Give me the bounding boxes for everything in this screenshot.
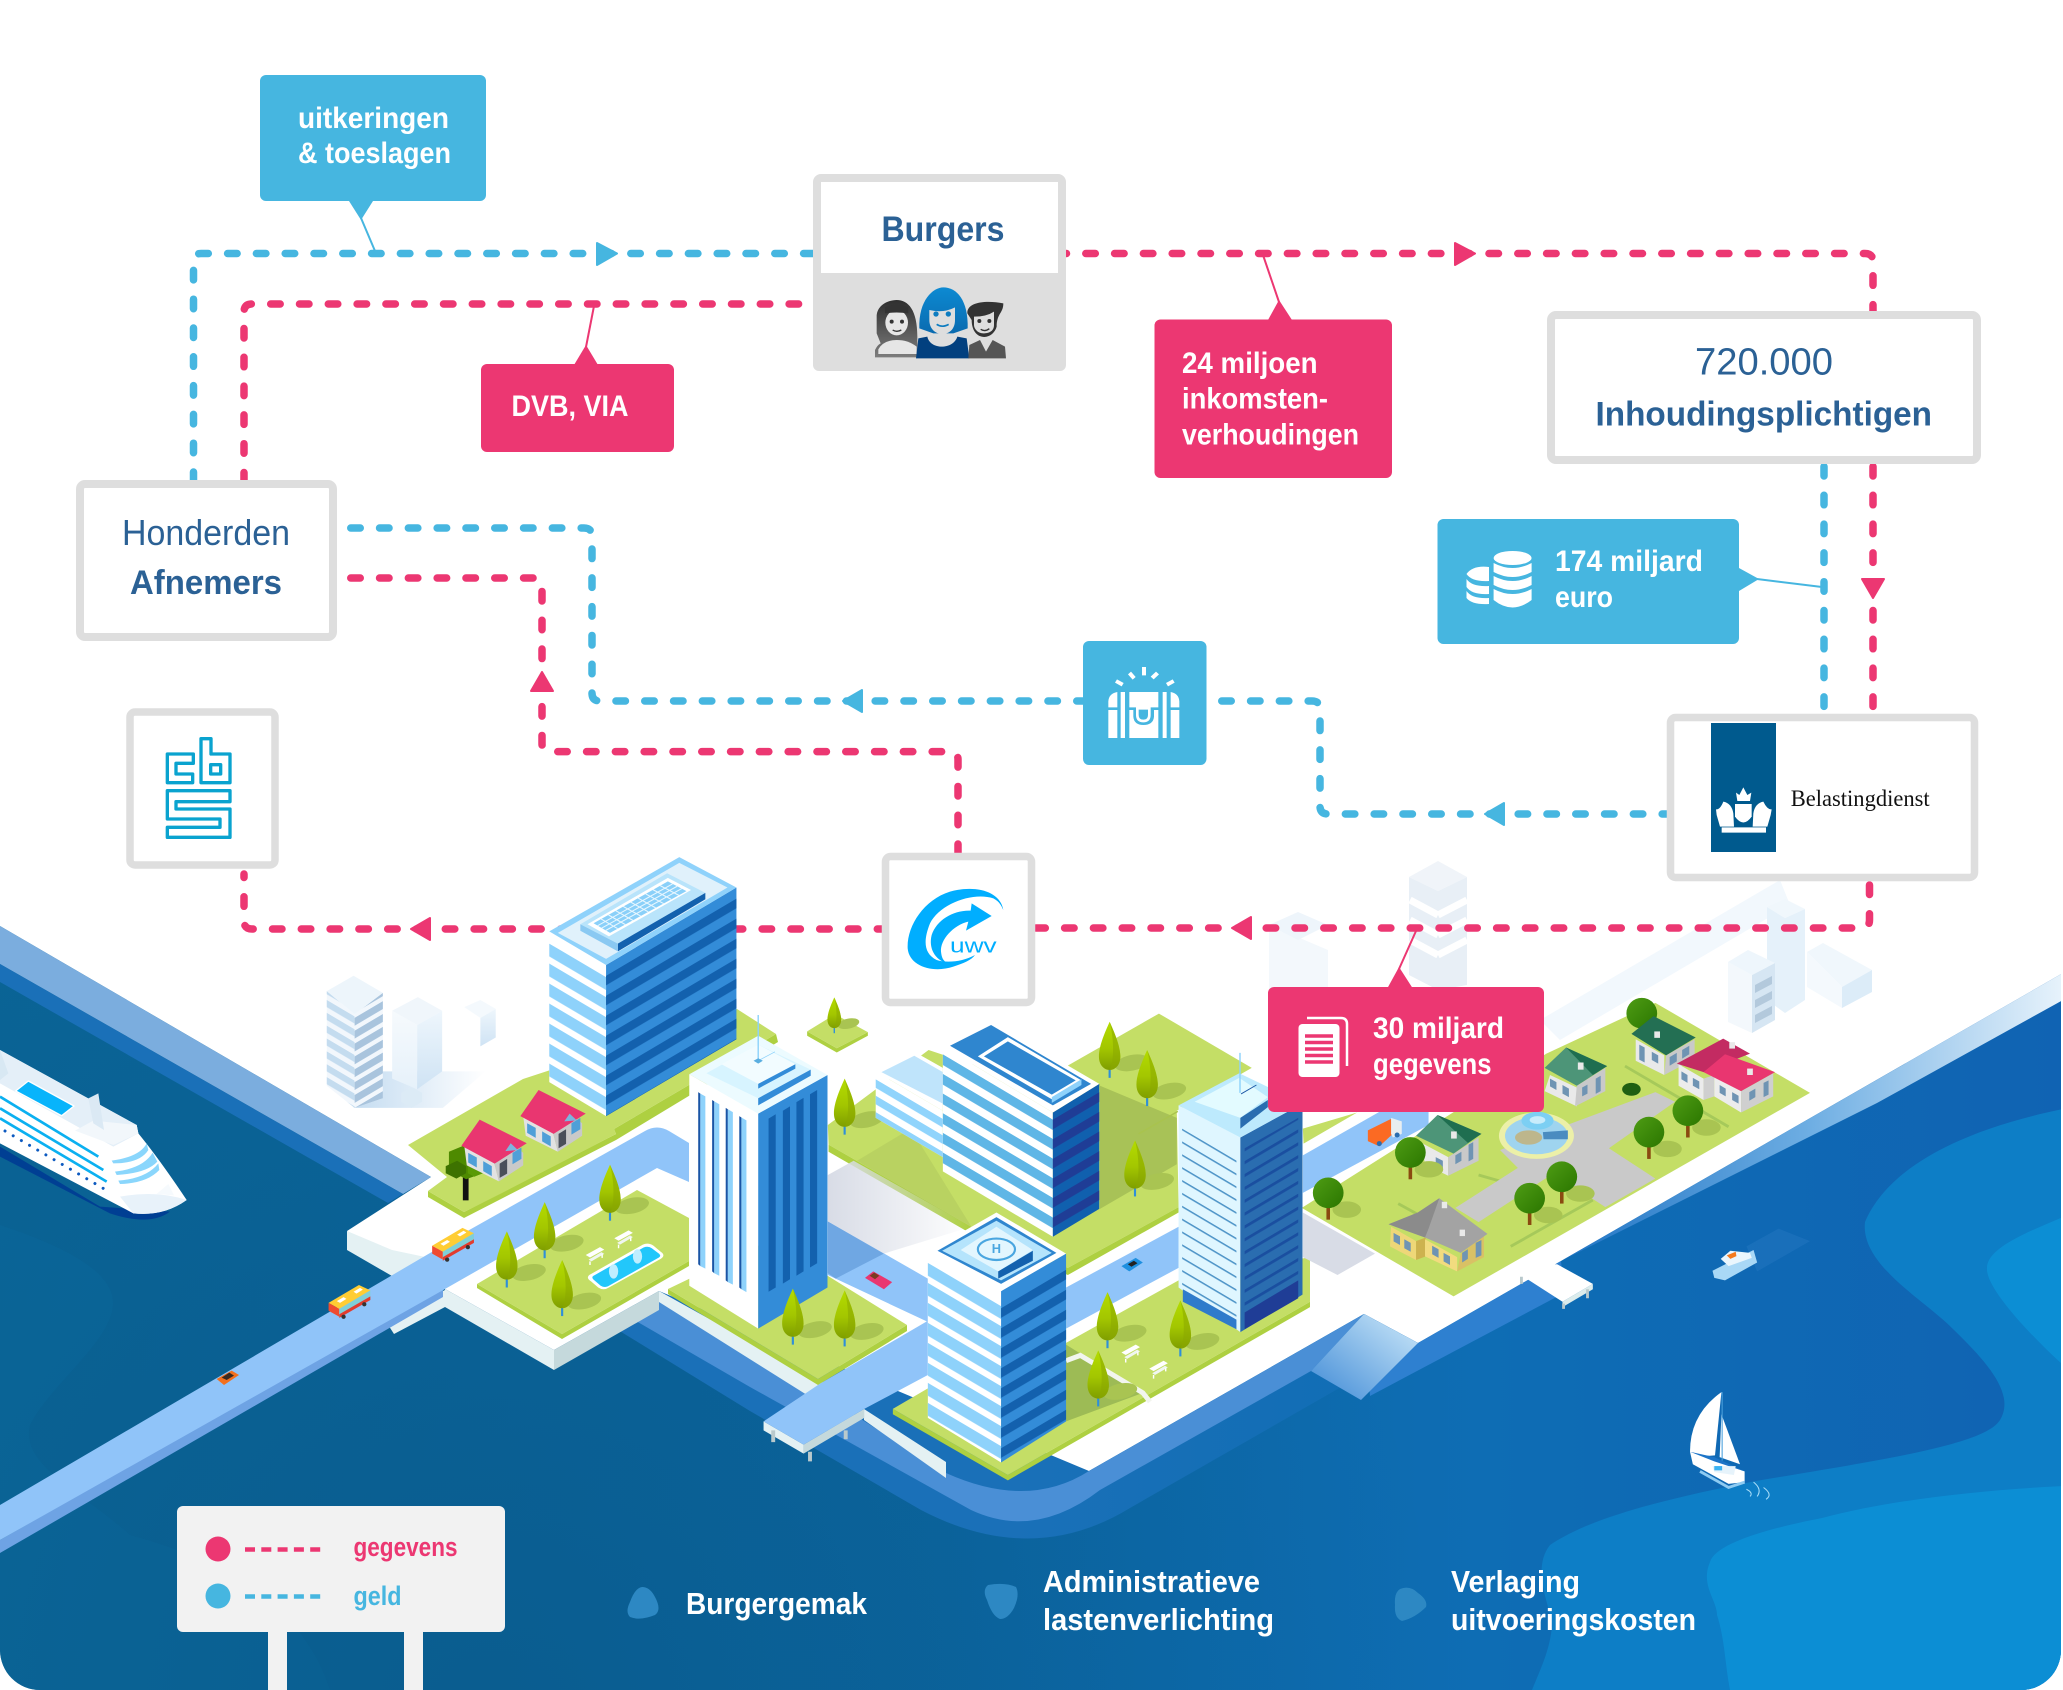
park pond [588, 1244, 663, 1289]
low annex building [876, 1052, 943, 1157]
logo bar: Rijksoverheid [1711, 723, 1776, 852]
callout: 24 miljoen inkomstenverhoudingen [1154, 255, 1392, 478]
goal: Administratieve lastenverlichting [985, 1564, 1274, 1637]
arrow: geld left to Afnemers [843, 690, 862, 712]
west platform and bridge [0, 1128, 946, 1553]
sea: left dark swell [0, 1652, 38, 1690]
box: 720.000 Inhoudingsplichtigen: Inhoudingsplichtigen [1596, 396, 1932, 434]
building: solar-roof office [549, 857, 736, 1116]
goal: Verlaging uitvoeringskosten [1395, 1564, 1696, 1637]
arrow: gegevens down [1862, 579, 1884, 598]
shore band: north-east fade [1561, 973, 2063, 1261]
pale background buildings: right [1269, 861, 1872, 1040]
housing lawn [1302, 1003, 1810, 1296]
tower lawn [668, 1289, 907, 1385]
bridge and road [0, 1128, 689, 1540]
icon: UWV logo: uwv [950, 935, 998, 958]
callout: 174 miljard euro: euro [1555, 581, 1613, 614]
connector: gegevens from CBS to UWV [244, 874, 882, 929]
goal: Burgergemak: Burgergemak [686, 1586, 868, 1621]
pale background buildings: left [327, 976, 496, 1108]
house: yellow [1389, 1198, 1487, 1271]
striped office with blue roof [943, 1021, 1099, 1237]
legend board: gegevens [354, 1532, 458, 1562]
park platform sides [445, 1289, 554, 1370]
callout: 30 miljard gegevens: gegevens [1373, 1048, 1492, 1081]
house: green roof 2 [1545, 1047, 1607, 1106]
connector: geld from Inhoudingsplichtigen to Belastingdienst [1820, 466, 1828, 712]
callout: 24 miljoen inkomstenverhoudingen: 24 miljoen [1182, 347, 1318, 380]
box: 720.000 Inhoudingsplichtigen: 720.000 [1695, 342, 1833, 384]
connector: gegevens from Burgers to Inhoudingsplichtigen [1057, 254, 1873, 315]
car: blue [1121, 1258, 1143, 1271]
connector: gegevens from Belastingdienst to UWV [1035, 885, 1870, 928]
tower: vertical stripes [689, 1015, 827, 1329]
callout: uitkeringen en toeslagen [260, 75, 486, 251]
connector: gegevens from UWV to Afnemers [351, 578, 958, 860]
park benches [586, 1247, 604, 1265]
box: Belastingdienst: Belastingdienst [1791, 786, 1930, 811]
box: Honderden Afnemers: Afnemers [130, 564, 282, 602]
box: UWV [886, 856, 1032, 1002]
shore band: east [1364, 1261, 1564, 1396]
lawns and square, east blocks [1302, 1003, 1810, 1309]
shore band: left mid [0, 964, 403, 1203]
heading: Burgers: Burgers [882, 210, 1004, 249]
houses: pink roof pair [461, 1015, 885, 1346]
tree: dark block tree [446, 1145, 483, 1200]
buildings centre [827, 997, 1302, 1462]
goal: Verlaging uitvoeringskosten: Verlaging [1451, 1564, 1580, 1599]
motor boat [1712, 1229, 1810, 1280]
buildings west [446, 857, 736, 1200]
legend board: geld [354, 1581, 402, 1611]
box: Honderden Afnemers [80, 484, 333, 637]
callout: 24 miljoen inkomstenverhoudingen: inkomsten- [1182, 382, 1328, 416]
shore band: left light [0, 926, 431, 1194]
car: orange on bridge [217, 1371, 239, 1385]
park platform dark side [554, 1291, 659, 1370]
icon box: treasury chest [1083, 641, 1206, 765]
fountain [1499, 1112, 1574, 1159]
goal: Administratieve lastenverlichting: lastenverlichting [1043, 1602, 1274, 1637]
arrow: geld left from Belastingdienst [1485, 803, 1504, 825]
building: helipad: H [992, 1241, 1001, 1256]
sea: bottom shade [207, 1417, 840, 1690]
connector: geld from Belastingdienst to treasury [1222, 701, 1667, 814]
bridge side [0, 1287, 443, 1553]
legend posts [268, 1632, 423, 1690]
arrow: gegevens left to CBS [411, 918, 430, 940]
sailboat [1690, 1392, 1769, 1499]
car: pink [865, 1271, 892, 1289]
tree behind houses [1626, 998, 1657, 1029]
box: Honderden Afnemers: Honderden [122, 512, 290, 553]
callout: 174 miljard euro: 174 miljard [1555, 545, 1703, 578]
callout: uitkeringen en toeslagen: uitkeringen [298, 102, 449, 135]
sea: lighter wave [1532, 1109, 2063, 1690]
lawns and roads, west blocks [408, 1009, 907, 1385]
goal: Verlaging uitvoeringskosten: uitvoeringskosten [1451, 1602, 1696, 1637]
arrow: gegevens right [1455, 243, 1475, 265]
sea: brightest wave [1707, 1486, 2063, 1690]
connector: gegevens from Burgers to Afnemers [244, 304, 801, 482]
box: Belastingdienst [1670, 718, 1974, 878]
callout: DVB, VIA: DVB, VIA [512, 390, 628, 423]
connector: gegevens from Inhoudingsplichtigen to Belastingdienst [1869, 466, 1877, 712]
icon: document [1298, 1018, 1347, 1077]
icon: UWV logo [908, 889, 1003, 969]
shore band: city light [636, 1291, 1364, 1521]
icon: coins [1466, 551, 1532, 608]
tower: light facade [1179, 1053, 1302, 1332]
quay ramp [1311, 1314, 1418, 1400]
front lawn benches [1121, 1345, 1140, 1362]
lawn with houses [428, 1034, 778, 1218]
callout: 174 miljard euro [1438, 519, 1822, 644]
box: 720.000 Inhoudingsplichtigen [1551, 315, 1977, 460]
park lawn [477, 1261, 689, 1339]
buses on bridge [329, 1228, 474, 1319]
arrow: gegevens up to Afnemers [531, 672, 553, 691]
box: Burgers [813, 178, 1066, 371]
shrub [1622, 1083, 1641, 1096]
callout: 30 miljard gegevens: 30 miljard [1373, 1012, 1504, 1045]
platform side faces [347, 1231, 445, 1334]
goal: Administratieve lastenverlichting: Administratieve [1043, 1564, 1260, 1599]
legend board [177, 1506, 505, 1690]
shore band: city dark [618, 1291, 1500, 1539]
arrow: geld right [597, 243, 617, 265]
small lawn [807, 1031, 868, 1052]
quay sides [659, 1291, 946, 1478]
shadow plaza [828, 1161, 971, 1254]
callout: 30 miljard gegevens [1268, 931, 1544, 1112]
icon: CBS logo [167, 739, 230, 837]
arrow: gegevens left to UWV [1232, 917, 1251, 939]
box: CBS [130, 712, 275, 865]
quay jetty [1507, 1264, 1593, 1302]
housing estate [1313, 998, 1810, 1499]
callout: DVB, VIA [481, 306, 674, 452]
sea background [0, 926, 2061, 1690]
house: green roof 1 [1416, 1115, 1481, 1176]
icon: three people [875, 287, 1006, 358]
square paving [1455, 1092, 1675, 1222]
central lawn [828, 1014, 1252, 1268]
callout: 24 miljoen inkomstenverhoudingen: verhoudingen [1182, 418, 1359, 452]
connector: geld from Afnemers to Burgers [194, 254, 813, 482]
callout: uitkeringen en toeslagen: & toeslagen [298, 137, 451, 170]
sea: right wave patch [1987, 1217, 2063, 1365]
cruise ship [0, 1050, 187, 1220]
front lawn [893, 1302, 1310, 1480]
connector: geld from Afnemers to treasury [351, 528, 1083, 701]
house: green roof 3 [1631, 1016, 1696, 1075]
truck [1368, 1118, 1402, 1146]
house: large pink roof [1677, 1039, 1775, 1112]
central road and pier [764, 1014, 1310, 1480]
building: helipad [928, 1212, 1066, 1462]
